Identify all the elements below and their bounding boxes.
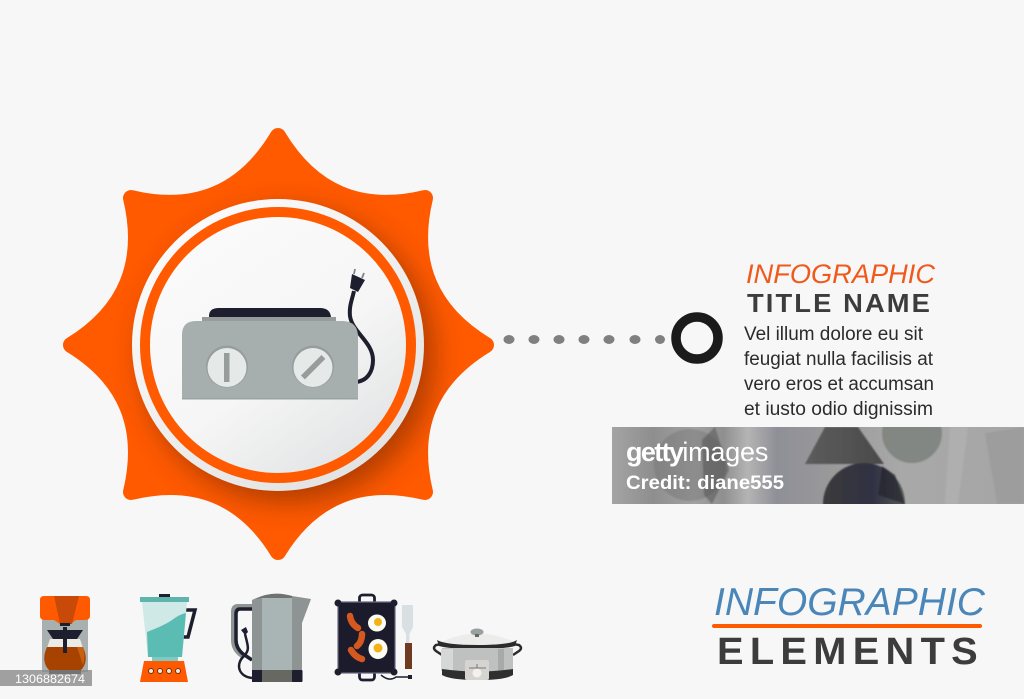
body text: feugiat nulla facilisis at: [744, 349, 934, 370]
white outer ring: [132, 199, 424, 491]
toaster cord and plug: [350, 269, 373, 382]
orange rule: [712, 624, 982, 628]
watermark band: [612, 427, 1024, 504]
heading: infographic title name: INFOGRAPHIC: [746, 259, 936, 289]
heading: infographic elements: [712, 581, 986, 673]
body text: [744, 324, 934, 420]
body text: vero eros et accumsan: [744, 374, 934, 395]
heading: infographic title name: TITLE NAME: [747, 288, 932, 318]
icon: blender: [140, 594, 195, 682]
stock number tag: [0, 670, 92, 686]
heading: infographic title name: [746, 259, 936, 318]
left dial: [206, 346, 248, 388]
stock number tag: 1306882674: [15, 674, 86, 686]
icon: kettle: [233, 594, 311, 682]
orange inner ring: [140, 207, 416, 483]
icon: coffee maker: [40, 596, 90, 674]
dotted connector: [504, 335, 665, 344]
ring marker: [676, 317, 718, 359]
orange sun shape: [71, 136, 486, 552]
center disc: [150, 217, 406, 473]
getty images wordmark: gettyimages: [626, 437, 768, 467]
body text: et iusto odio dignissim: [744, 399, 933, 420]
body text: Vel illum dolore eu sit: [744, 324, 924, 345]
heading: infographic elements: ELEMENTS: [717, 631, 984, 673]
sun badge with toaster icon: [71, 136, 486, 552]
icon: toaster: [182, 269, 373, 400]
icon: griddle: [334, 595, 413, 680]
heading: infographic elements: INFOGRAPHIC: [714, 581, 986, 624]
right dial: [292, 346, 334, 388]
disc shadow: [142, 210, 434, 502]
credit line: Credit: diane555: [626, 473, 784, 494]
icon: slow cooker: [434, 628, 521, 680]
